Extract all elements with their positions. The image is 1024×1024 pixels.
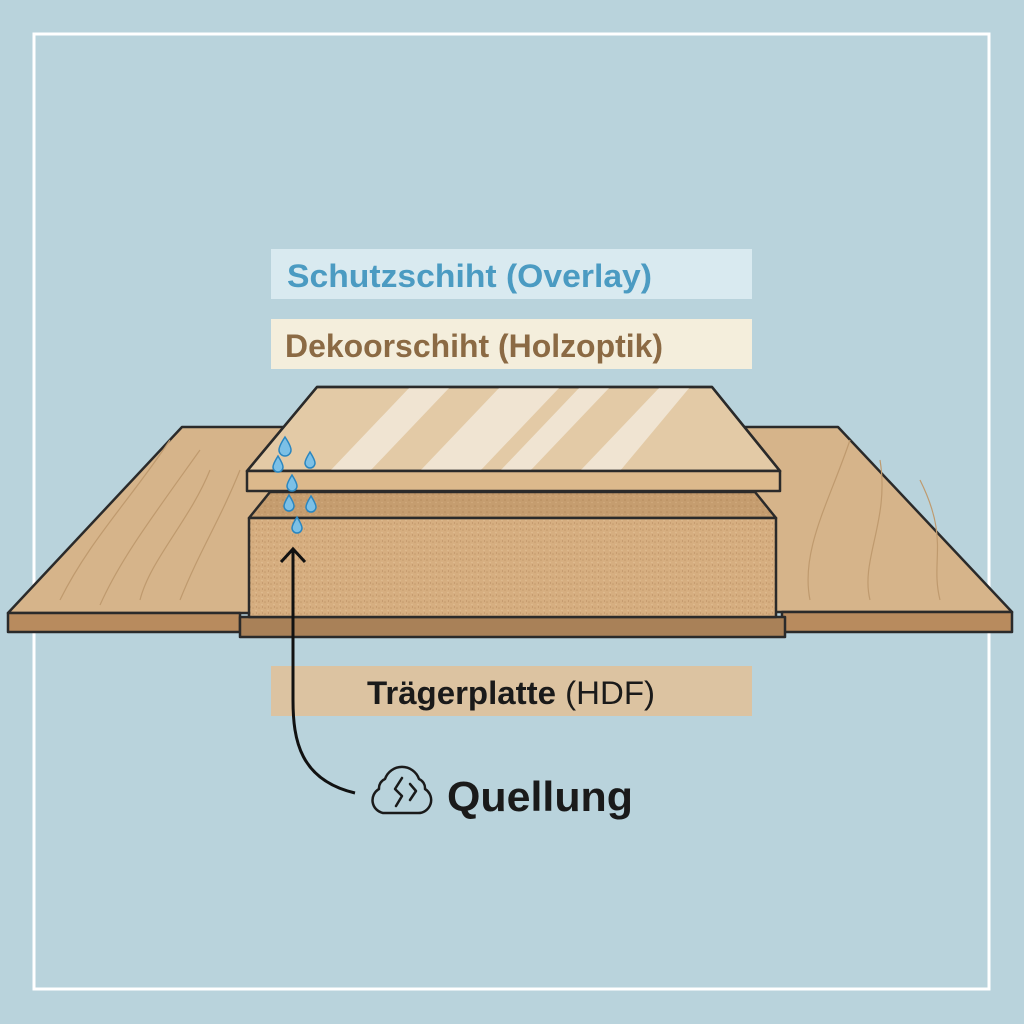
- label: Dekorschicht: [271, 319, 752, 369]
- decor top board: [247, 387, 780, 491]
- left plank: [8, 427, 300, 632]
- water drops: [273, 437, 316, 533]
- right plank: [720, 427, 1012, 632]
- label: Quellung: Quellung: [447, 773, 633, 820]
- icon: cloud swelling: [373, 767, 431, 813]
- label: Dekorschicht: Dekoorschiht (Holzoptik): [285, 328, 663, 364]
- label: Trägerplatte: Trägerplatte (HDF): [367, 675, 655, 711]
- label: Schutzschicht: Schutzschiht (Overlay): [287, 258, 652, 294]
- arrow: swelling upward: [281, 549, 355, 793]
- label: Schutzschicht: [271, 249, 752, 299]
- HDF core board: [240, 492, 785, 637]
- label: Trägerplatte: [271, 666, 752, 716]
